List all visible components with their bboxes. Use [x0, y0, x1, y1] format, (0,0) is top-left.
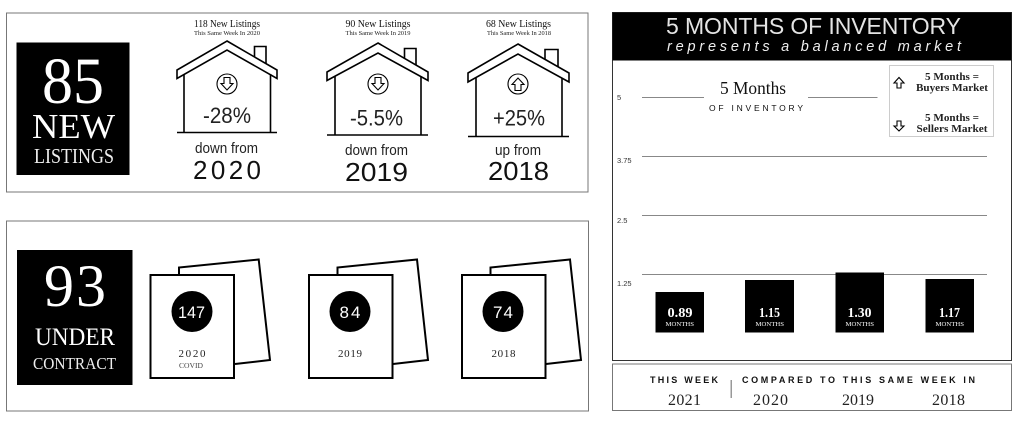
bar: 2018 1.17: 1.17: [939, 306, 960, 321]
card stack: 2019: [309, 260, 428, 378]
stat block: 85 new listings: LISTINGS: [34, 144, 114, 168]
panel: time period footer: 2018: [932, 392, 965, 409]
bar: 2019 1.30: [836, 272, 884, 332]
bar: 2018 1.17: MONTHS: [936, 321, 964, 328]
bar: this week 0.89: MONTHS: [666, 321, 694, 328]
icon: house down: [327, 43, 428, 135]
stat block: 85 new listings: 85: [42, 45, 104, 118]
comparison: 2018 listings: [468, 18, 569, 186]
header banner: 5 MONTHS OF INVENTORY: [666, 13, 961, 39]
icon: up arrow: [894, 78, 904, 88]
bar: this week 0.89: [656, 292, 704, 332]
stat block: 85 new listings: [16, 42, 130, 175]
card stack: 2020: COVID: [179, 361, 204, 370]
comparison: 2018 listings: +25%: [493, 106, 545, 130]
comparison: 2020 listings: down from: [195, 140, 258, 157]
legend: Buyers Market: [916, 83, 989, 94]
y axis labels: 5: [617, 93, 621, 102]
comparison: 2018 listings: This Same Week In 2018: [487, 30, 551, 37]
stat block: 93 under contract: CONTRACT: [33, 354, 117, 373]
bar chart: [617, 93, 987, 332]
comparison: 2019 listings: [327, 18, 428, 187]
icon: house down: [177, 41, 277, 132]
chart subtitle: [709, 78, 803, 113]
panel: time period footer: 2019: [842, 392, 874, 409]
header banner: [612, 12, 1012, 60]
comparison: 2020 listings: [177, 18, 277, 185]
panel: time period footer: 2021: [668, 392, 701, 409]
bar: 2018 1.17: [926, 279, 974, 332]
icon: down arrow: [894, 121, 904, 131]
card stack: 2019: 84: [340, 303, 360, 322]
card stack: 2020: 2020: [178, 348, 206, 360]
chart subtitle: 5 Months: [720, 78, 786, 98]
panel: five months of inventory chart: [612, 12, 1012, 360]
panel: time period footer: [612, 364, 1012, 410]
comparison: 2020 listings: 118 New Listings: [194, 18, 260, 30]
comparison: 2018 listings: 68 New Listings: [486, 18, 551, 30]
stat block: 85 new listings: NEW: [32, 107, 115, 146]
comparison: 2019 listings: This Same Week In 2019: [346, 30, 410, 37]
icon: house up: [468, 44, 569, 136]
comparison: 2019 listings: down from: [345, 142, 408, 159]
bar: 2020 1.15: 1.15: [759, 306, 780, 321]
card stack: 2020: [150, 260, 270, 378]
card stack: 2018: [462, 260, 581, 378]
panel: under contract: [6, 221, 588, 411]
panel: new listings: [6, 13, 588, 192]
comparison: 2019 listings: 90 New Listings: [346, 18, 410, 30]
legend: [890, 66, 994, 136]
panel: time period footer: COMPARED TO THIS SAME WEEK IN: [742, 375, 975, 385]
y axis labels: 3.75: [617, 156, 632, 165]
comparison: 2018 listings: 2018: [488, 156, 549, 186]
bar: 2019 1.30: MONTHS: [846, 321, 874, 328]
legend: 5 Months =: [925, 113, 979, 124]
panel: time period footer: THIS WEEK: [650, 375, 718, 385]
header banner: represents a balanced market: [667, 39, 962, 55]
card stack: 2019: 2019: [338, 348, 362, 360]
card stack: 2020: 147: [178, 303, 205, 322]
stat block: 93 under contract: [17, 250, 132, 385]
comparison: 2018 listings: up from: [495, 142, 541, 159]
card stack: 2018: 74: [493, 303, 513, 322]
card stack: 2018: 2018: [492, 348, 516, 360]
legend: Sellers Market: [916, 124, 988, 135]
comparison: 2020 listings: This Same Week In 2020: [194, 30, 260, 37]
comparison: 2019 listings: -5.5%: [350, 106, 403, 130]
bar: 2020 1.15: [745, 280, 794, 332]
legend: 5 Months =: [925, 72, 979, 83]
comparison: 2019 listings: 2019: [345, 157, 408, 187]
y axis labels: 2.5: [617, 216, 627, 225]
stat block: 93 under contract: UNDER: [35, 324, 115, 351]
chart subtitle: OF INVENTORY: [709, 103, 803, 113]
y axis labels: [617, 93, 632, 288]
y axis labels: 1.25: [617, 279, 632, 288]
comparison: 2020 listings: 2020: [193, 155, 261, 185]
bar: 2020 1.15: MONTHS: [756, 321, 784, 328]
bar: this week 0.89: 0.89: [668, 306, 692, 321]
stat block: 93 under contract: 93: [44, 253, 106, 319]
panel: time period footer: 2020: [753, 392, 788, 409]
bar: 2019 1.30: 1.30: [848, 306, 872, 321]
comparison: 2020 listings: -28%: [203, 103, 251, 128]
